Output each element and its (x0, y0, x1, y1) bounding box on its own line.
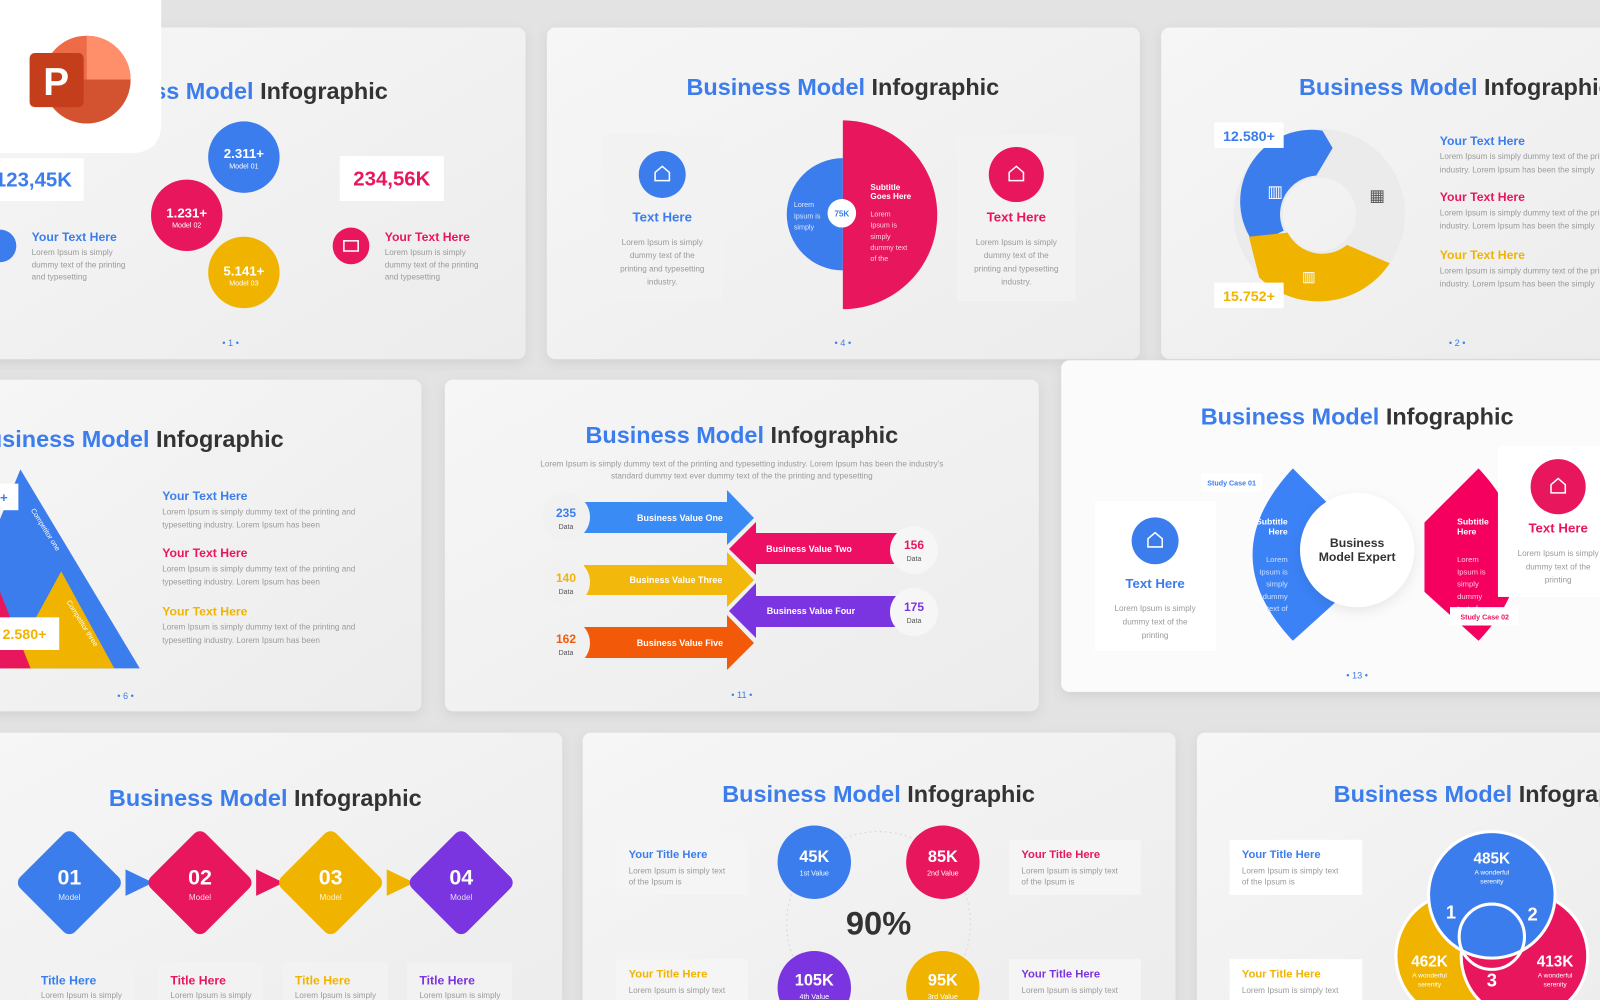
arrow one: Business Value One (637, 513, 723, 523)
card left (1095, 501, 1216, 651)
half circles chart (787, 120, 937, 309)
text block right (333, 228, 479, 282)
venn diagram: 1 (1446, 901, 1456, 922)
diamond 02: 02 (188, 866, 212, 890)
venn diagram (1396, 832, 1588, 1000)
title: Business Model Infographic (722, 781, 1035, 807)
study case 02 (1450, 607, 1518, 626)
text block right: dummy text of the printing (385, 260, 479, 269)
title cards (1230, 840, 1362, 1000)
circle model 03 (208, 237, 280, 308)
circle model 01 (208, 121, 280, 193)
circle model 03: 5.141+ (223, 264, 265, 279)
data circles: 235 (556, 506, 576, 520)
diamond 04 (406, 828, 516, 937)
text list: Your Text Here (1440, 248, 1525, 262)
pink wing: Here (1457, 527, 1477, 537)
value circles: 45K (799, 848, 829, 866)
diamond 03 (276, 828, 414, 937)
text list: Your Text Here (1440, 134, 1525, 148)
label 12.580 (1214, 122, 1284, 148)
half circles chart: Ipsum is (794, 212, 821, 220)
triangle diagram: Competitor three (65, 599, 100, 648)
card right: industry. (1001, 278, 1031, 287)
card left: industry. (647, 278, 677, 287)
title cards: Title Here (170, 974, 226, 988)
text list: industry. Lorem Ipsum has been the simply (1440, 280, 1596, 289)
subtitle: standard dummy text ever dummy text of the the printing and typesetting (611, 472, 873, 481)
title cards: Lorem Ipsum is simply text (629, 986, 726, 995)
text list: Lorem Ipsum is simply dummy text of the printing and (162, 507, 356, 516)
data circles: Data (907, 618, 921, 625)
venn diagram: serenity (1543, 982, 1567, 989)
pink wing: simply (1457, 580, 1479, 589)
venn diagram: 413K (1537, 953, 1573, 970)
slide 13: business model expert (1061, 360, 1600, 692)
data circles: 156 (904, 538, 924, 552)
ring chart: ▥ (1302, 270, 1316, 286)
circle model 01: Model 01 (229, 162, 259, 170)
slide 4: half circles (547, 28, 1140, 359)
center circle (1300, 493, 1414, 607)
data circles: Data (559, 650, 573, 657)
title cards: of the Ipsum is (1242, 878, 1295, 887)
title cards (29, 962, 512, 1000)
circle model 02: Model 02 (172, 222, 201, 230)
title cards: Your Title Here (629, 969, 707, 981)
half circles chart: of the (870, 255, 888, 263)
study case 01 (1201, 473, 1262, 492)
arrow two (729, 522, 900, 575)
pink wing: Ipsum is (1457, 567, 1486, 576)
title cards: of the Ipsum is (1021, 878, 1074, 887)
title: Business Model Infographic (109, 785, 422, 811)
half circles chart: simply (870, 233, 891, 241)
value box left (0, 158, 84, 201)
title cards: Your Title Here (1242, 969, 1321, 981)
study case 01: Study Case 01 (1207, 480, 1256, 488)
diamond 01: 01 (57, 866, 81, 890)
text list: Your Text Here (162, 489, 248, 503)
value circles: 85K (928, 848, 958, 866)
value box right (340, 156, 444, 201)
card left: dummy text of the (1123, 617, 1188, 626)
diamond 03: Model (320, 893, 342, 902)
pink wing (1424, 468, 1519, 641)
venn diagram: A wonderful (1538, 973, 1573, 980)
card right: printing (1545, 576, 1572, 585)
slide: venn (1197, 733, 1600, 1000)
slide 2: ring chart (1161, 28, 1600, 359)
pink wing: dummy (1457, 592, 1482, 601)
page number: • 11 • (731, 690, 752, 700)
triangle diagram: + (0, 490, 8, 505)
blue wing: dummy (1263, 592, 1288, 601)
slide 11: arrows (445, 380, 1039, 711)
center circle: Business (1330, 536, 1385, 550)
arrow three (584, 552, 754, 607)
circle model 01: 2.311+ (224, 146, 264, 161)
card right: Text Here (1528, 521, 1588, 536)
text block left: dummy text of the printing (32, 260, 126, 269)
title cards: Your Title Here (629, 849, 707, 861)
card right (1498, 446, 1600, 597)
text list: typesetting industry. Lorem Ipsum has been (162, 578, 320, 587)
text list: industry. Lorem Ipsum has been the simply (1440, 222, 1596, 231)
value circles: 1st Value (800, 870, 829, 878)
arrow four: Business Value Four (767, 606, 856, 616)
title cards: Lorem Ipsum is simply (295, 991, 377, 1000)
arrow one (584, 490, 754, 545)
value circles: 95K (928, 972, 958, 990)
center percentage (787, 832, 970, 1000)
title cards: of the Ipsum is (629, 878, 682, 887)
subtitle (540, 459, 943, 481)
blue wing: simply (1266, 580, 1288, 589)
value box right: 234,56K (353, 169, 431, 191)
pink wing: Lorem (1457, 555, 1479, 564)
text block left: and typesetting (32, 273, 87, 282)
venn diagram: 3 (1487, 970, 1497, 991)
diamond 04: Model (450, 893, 473, 902)
diamond 02 (145, 828, 284, 937)
pink wing: Subtitle (1457, 516, 1489, 526)
half circles chart: 75K (834, 209, 849, 218)
arrow three: Business Value Three (630, 575, 722, 585)
page number: • 4 • (835, 338, 851, 348)
study case 02: Study Case 02 (1460, 613, 1509, 621)
arrow four (729, 583, 900, 638)
slide 6: triangles (0, 380, 421, 711)
text list (162, 489, 356, 645)
text list: Lorem Ipsum is simply dummy text of the printing and (162, 564, 356, 573)
title cards: Lorem Ipsum is simply text (629, 866, 726, 875)
title cards: Lorem Ipsum is simply text (1242, 986, 1339, 995)
label 12.580: 12.580+ (1223, 129, 1275, 145)
title cards: Lorem Ipsum is simply text (1021, 866, 1119, 875)
title cards: Title Here (419, 974, 475, 988)
diamond 01 (15, 828, 153, 937)
title cards: Your Title Here (1021, 849, 1100, 861)
card right: Lorem Ipsum is simply (976, 238, 1058, 247)
half circles chart: dummy text (870, 244, 907, 252)
pink wing: text of (1457, 604, 1479, 613)
circle model 02: 1.231+ (166, 205, 207, 220)
title cards: Title Here (295, 974, 351, 988)
blue wing: Subtitle (1256, 516, 1288, 526)
title: Business Model Infographic (585, 422, 898, 448)
venn diagram: serenity (1480, 879, 1504, 886)
venn diagram: 462K (1411, 953, 1448, 970)
blue wing: Here (1268, 527, 1288, 537)
text block right: Lorem Ipsum is simply (385, 248, 467, 257)
card right: printing and typesetting (974, 264, 1059, 273)
text block right: and typesetting (385, 273, 440, 282)
ring chart: ▦ (1369, 187, 1385, 205)
text list: Your Text Here (1440, 190, 1525, 204)
triangle diagram: 2.580+ (2, 627, 47, 643)
ring chart: ▥ (1267, 183, 1283, 201)
center percentage: 90% (846, 905, 911, 942)
card left: Lorem Ipsum is simply (622, 238, 704, 247)
title: Business Model Infographic (686, 74, 999, 100)
subtitle: Lorem Ipsum is simply dummy text of the printing and typesetting industry. Lorem Ipsum has been the industry's (540, 459, 943, 468)
card right: dummy text of the (984, 251, 1049, 260)
diamond 03: 03 (319, 866, 343, 890)
text list: typesetting industry. Lorem Ipsum has been (162, 636, 320, 645)
card left (603, 135, 722, 301)
data circles: 140 (556, 571, 576, 585)
title cards: Lorem Ipsum is simply text (1242, 866, 1339, 875)
blue wing: Lorem (1266, 555, 1288, 564)
venn diagram: 485K (1474, 850, 1510, 867)
title cards (616, 840, 1141, 1000)
blue wing: text of (1267, 604, 1289, 613)
venn diagram: serenity (1418, 982, 1442, 989)
card right: Text Here (987, 209, 1046, 224)
diamond 01: Model (58, 893, 81, 902)
card left: printing (1142, 631, 1169, 640)
slide: diamonds (0, 733, 562, 1000)
ring chart (1240, 130, 1390, 301)
data circles (542, 493, 938, 667)
card left: Text Here (633, 209, 692, 224)
value circles: 105K (795, 972, 834, 990)
arrows diagram (542, 490, 938, 670)
venn diagram: A wonderful (1412, 973, 1447, 980)
triangle diagram (0, 469, 140, 668)
data circles: 162 (556, 632, 576, 646)
card right (957, 135, 1076, 301)
label 15.752: 15.752+ (1223, 289, 1275, 305)
card right: dummy text of the (1526, 562, 1591, 571)
half circles chart: Subtitle (870, 183, 901, 192)
title: Business Model Infographic (1201, 403, 1514, 429)
data circles: Data (559, 589, 573, 596)
data circles: Data (907, 556, 921, 563)
half circles chart: Lorem (870, 210, 891, 218)
data circles: 175 (904, 600, 924, 614)
half circles chart: simply (794, 224, 814, 232)
title cards: Lorem Ipsum is simply (170, 991, 252, 1000)
diamond 04: 04 (449, 866, 473, 890)
text list: typesetting industry. Lorem Ipsum has been (162, 521, 320, 530)
card left: dummy text of the (630, 251, 695, 260)
arrow five (584, 615, 754, 670)
icon: powerpoint logo: P (43, 61, 69, 104)
text block left: Your Text Here (32, 230, 117, 244)
page number: • 2 • (1449, 338, 1465, 348)
text block left (0, 230, 126, 282)
title: Business Model Infographic (75, 78, 388, 104)
card left: Lorem Ipsum is simply (1115, 604, 1197, 613)
slide 1: circles models (0, 28, 526, 359)
label 15.752 (1214, 283, 1284, 308)
value circles (778, 826, 980, 1000)
data circles: Data (559, 524, 573, 531)
card left: Text Here (1125, 576, 1185, 591)
text list: Your Text Here (162, 546, 248, 560)
page number: • 1 • (222, 338, 239, 348)
text block right: Your Text Here (385, 230, 470, 244)
venn diagram: 2 (1528, 903, 1538, 924)
circle model 02 (151, 180, 222, 251)
half circles chart: Goes Here (870, 192, 912, 201)
title cards: Lorem Ipsum is simply text (1021, 986, 1119, 995)
title cards: Lorem Ipsum is simply (41, 991, 123, 1000)
triangle diagram: Competitor one (29, 507, 62, 553)
page number: • 6 • (117, 691, 134, 701)
title cards: Your Title Here (1021, 969, 1100, 981)
text list: Your Text Here (162, 604, 248, 618)
title cards: Your Title Here (1242, 849, 1321, 861)
text block left: Lorem Ipsum is simply (32, 248, 114, 257)
center circle: Model Expert (1319, 550, 1396, 564)
icon: powerpoint logo (0, 0, 161, 153)
slide: 90% circles (583, 733, 1176, 1000)
blue wing: Ipsum is (1259, 567, 1288, 576)
half circles chart: Ipsum is (870, 222, 897, 230)
title cards: Lorem Ipsum is simply (419, 991, 501, 1000)
text list (1440, 134, 1600, 289)
arrow five: Business Value Five (637, 638, 723, 648)
arrow two: Business Value Two (766, 544, 852, 554)
card right: Lorem Ipsum is simply (1518, 549, 1600, 558)
value circles: 2nd Value (927, 870, 959, 878)
text list: industry. Lorem Ipsum has been the simply (1440, 165, 1596, 174)
circle model 03: Model 03 (229, 280, 259, 288)
text list: Lorem Ipsum is simply dummy text of the printing and (162, 623, 356, 632)
half circles chart: Lorem (794, 201, 814, 209)
venn diagram: A wonderful (1475, 869, 1510, 876)
diamond 02: Model (189, 893, 211, 902)
page number: • 13 • (1346, 671, 1368, 681)
card left: printing and typesetting (620, 264, 705, 273)
title cards: Title Here (41, 974, 97, 988)
blue wing (1253, 468, 1347, 641)
